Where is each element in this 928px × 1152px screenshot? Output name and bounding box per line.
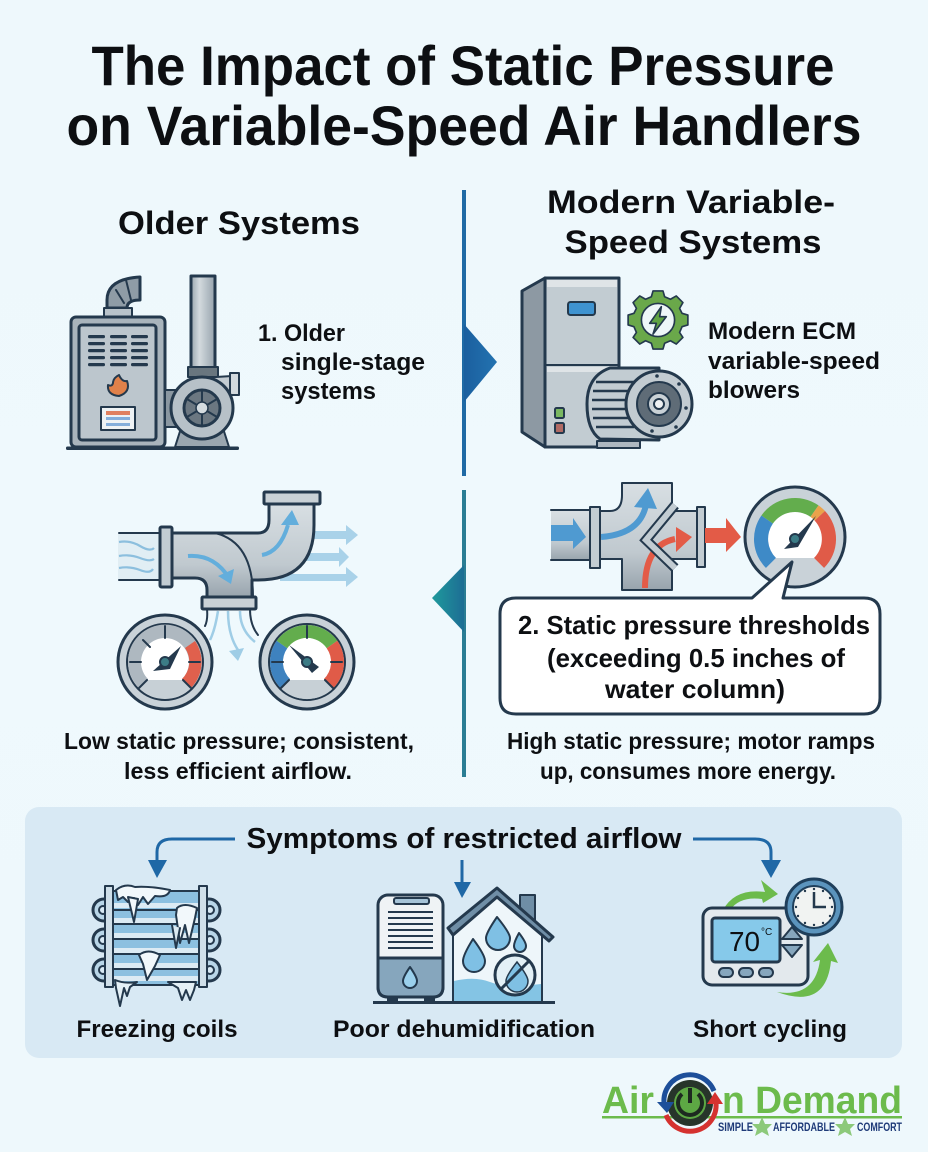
callout: static pressure thresholds [500,562,880,714]
heading: symptoms: Symptoms of restricted airflow [246,823,682,855]
callout: static pressure thresholds: 2. Static pressure thresholds [518,610,870,640]
icon: green gear with bolt [628,291,688,349]
text: modern ECM blowers: variable-speed [708,348,880,375]
caption: high static pressure [507,728,875,784]
icon: older furnace and blower [66,276,239,450]
caption: low static pressure: less efficient airflow. [124,758,352,784]
callout: static pressure thresholds: water column) [604,674,785,704]
heading: modern variable-speed systems: Speed Systems [564,224,822,260]
caption: low static pressure: Low static pressure; consistent, [64,728,414,754]
icon: thermostat with clock and cycling arrows [703,879,842,997]
text: older single-stage systems: single-stage [281,349,425,376]
icon: dehumidifier and damp house [373,888,555,1004]
text: older single-stage systems: 1. Older [258,320,345,347]
logo: Air On Demand: Air [602,1080,654,1122]
arrow: upper divider pointing right [462,190,497,476]
callout: static pressure thresholds: (exceeding 0.5 inches of [547,643,845,673]
icon: modern cabinet with ECM blower [522,278,692,448]
arrow: to poor dehumidification [454,860,471,898]
gauge: right balanced pressure [260,615,354,709]
caption: low static pressure [64,728,414,784]
caption: high static pressure: High static pressure; motor ramps [507,728,875,754]
text: older single-stage systems: systems [281,378,376,405]
logo: Air On Demand: COMFORT [857,1120,902,1134]
icon: low-pressure pipe with airflow [118,492,358,709]
logo: Air On Demand: AFFORDABLE [773,1120,835,1134]
logo: Air On Demand: n Demand [722,1080,902,1122]
heading: modern variable-speed systems: Modern Variable- [547,184,835,220]
heading: modern variable-speed systems [547,184,835,260]
panel: symptoms of restricted airflow [25,807,902,1058]
icon: high-pressure pipe with damper [551,483,845,590]
label: poor dehumidification: Poor dehumidification [333,1016,595,1043]
gauge: high pressure [745,487,845,587]
title: The Impact of Static Pressure [92,34,834,97]
icon: thermostat with clock and cycling arrows: °C [761,927,772,938]
heading: older systems: Older Systems [118,205,360,241]
gauge: left low pressure [118,615,212,709]
arrow: to short cycling [693,839,781,878]
text: older single-stage systems [258,320,425,405]
text: modern ECM blowers: blowers [708,377,800,404]
label: freezing coils: Freezing coils [76,1016,238,1043]
arrow: to freezing coils [148,839,235,878]
label: short cycling: Short cycling [693,1016,847,1043]
icon: freezing coils [93,886,220,1006]
text: modern ECM blowers [708,318,880,404]
caption: high static pressure: up, consumes more energy. [540,758,836,784]
icon: thermostat with clock and cycling arrows: 70 [729,926,760,957]
title [66,34,862,157]
logo: Air On Demand [602,1075,902,1136]
text: modern ECM blowers: Modern ECM [708,318,856,345]
title: on Variable-Speed Air Handlers [66,94,862,157]
arrow: lower divider pointing left [432,490,466,777]
logo: Air On Demand: SIMPLE [718,1120,753,1134]
